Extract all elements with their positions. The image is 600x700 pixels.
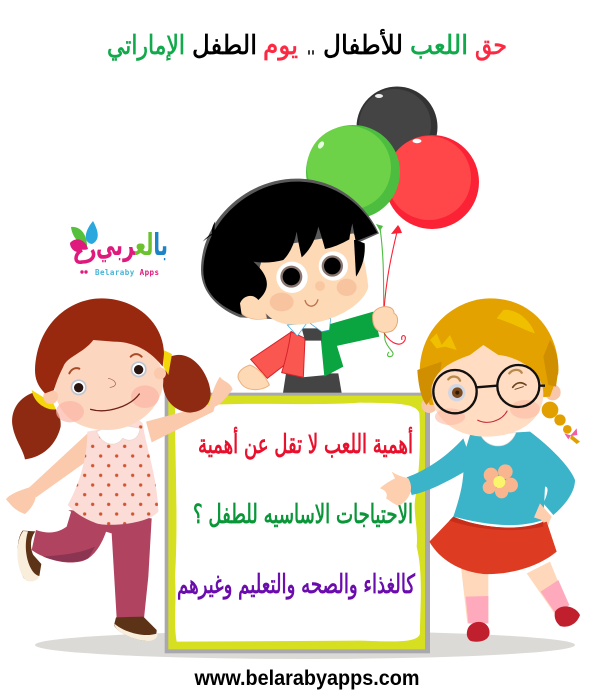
boy: face xyxy=(259,233,368,325)
board text: الاحتياجات الاساسيه للطفل ؟ xyxy=(193,500,413,530)
girl 1: collar xyxy=(97,423,140,444)
girl 1: right pigtail xyxy=(163,350,211,413)
title: يوم xyxy=(263,31,298,61)
logo xyxy=(70,221,168,277)
girl 2: legs xyxy=(461,562,569,623)
boy: ear xyxy=(238,295,267,319)
boy: green arm xyxy=(327,307,398,347)
boy: red arm xyxy=(238,332,292,390)
girl with glasses xyxy=(380,298,580,642)
balloons xyxy=(306,86,479,357)
girl with pigtails xyxy=(6,298,233,641)
girl 2: sweater xyxy=(453,432,575,525)
logo: arabic wordmark: بالعربي xyxy=(96,228,168,263)
girl 1: bent leg xyxy=(32,510,107,563)
title: للأطفال xyxy=(323,28,403,61)
girl 2: shoes xyxy=(467,606,580,642)
girl 2: face xyxy=(432,345,543,437)
balloon strings xyxy=(376,224,405,357)
girl 2: flower xyxy=(483,464,518,498)
girl 2: hand on hip xyxy=(534,503,552,533)
girl 1: shoes xyxy=(17,531,157,641)
board text: كالغذاء والصحه والتعليم وغيرهم xyxy=(177,570,415,600)
girl 2: skirt xyxy=(429,517,557,574)
boy: cowlick xyxy=(203,221,216,242)
title: .. xyxy=(307,31,315,61)
title: الطفل xyxy=(192,31,257,61)
girl 2: bow xyxy=(564,428,577,439)
balloon: green xyxy=(306,125,400,219)
title xyxy=(107,28,507,61)
girl 1: polka dot top xyxy=(68,421,158,525)
girl 2: braid xyxy=(542,402,580,444)
girl 1: face xyxy=(43,335,166,430)
girl 1: left pigtail xyxy=(12,390,61,459)
boy xyxy=(201,179,398,395)
girl 1: right arm xyxy=(146,377,233,442)
girl 2: left arm and hand xyxy=(380,438,473,505)
girl 2: hair highlight xyxy=(497,310,535,333)
balloon: black xyxy=(356,86,438,168)
boy: jacket xyxy=(282,318,343,377)
title: الإماراتي xyxy=(107,31,185,61)
boy: nose and smile xyxy=(305,281,325,306)
title: حق xyxy=(475,31,507,61)
girl 1: standing leg xyxy=(68,510,152,618)
board xyxy=(165,393,430,653)
girl 1: hair xyxy=(35,298,164,393)
board text: أهمية اللعب لا تقل عن أهمية xyxy=(198,426,413,460)
boy: cheeks xyxy=(270,279,357,311)
girl 2: glasses xyxy=(433,365,545,413)
boy: eyes xyxy=(276,251,348,293)
girl 2: ear xyxy=(545,384,561,400)
website footer: www.belarabyapps.com xyxy=(194,667,420,690)
girl 2: collar xyxy=(481,433,516,446)
ground shadow xyxy=(35,631,575,659)
boy: trousers xyxy=(283,373,342,395)
girl 2: wink and brows xyxy=(448,370,526,389)
girl 2: smile xyxy=(477,411,507,422)
girl 1: left arm xyxy=(6,433,91,514)
boy: hair front xyxy=(203,182,377,315)
girl 2: eye xyxy=(448,384,465,401)
title: اللعب xyxy=(410,31,468,61)
girl 2: hair back xyxy=(420,298,558,405)
girl 1: brows, nose, smile xyxy=(69,354,142,411)
boy: hair back xyxy=(201,179,379,320)
balloon: red xyxy=(385,135,479,229)
logo: splash icon xyxy=(70,221,98,274)
board text xyxy=(177,426,415,600)
logo: latin name: Belaraby Apps xyxy=(95,268,159,277)
girl 1: eyes xyxy=(71,361,147,395)
